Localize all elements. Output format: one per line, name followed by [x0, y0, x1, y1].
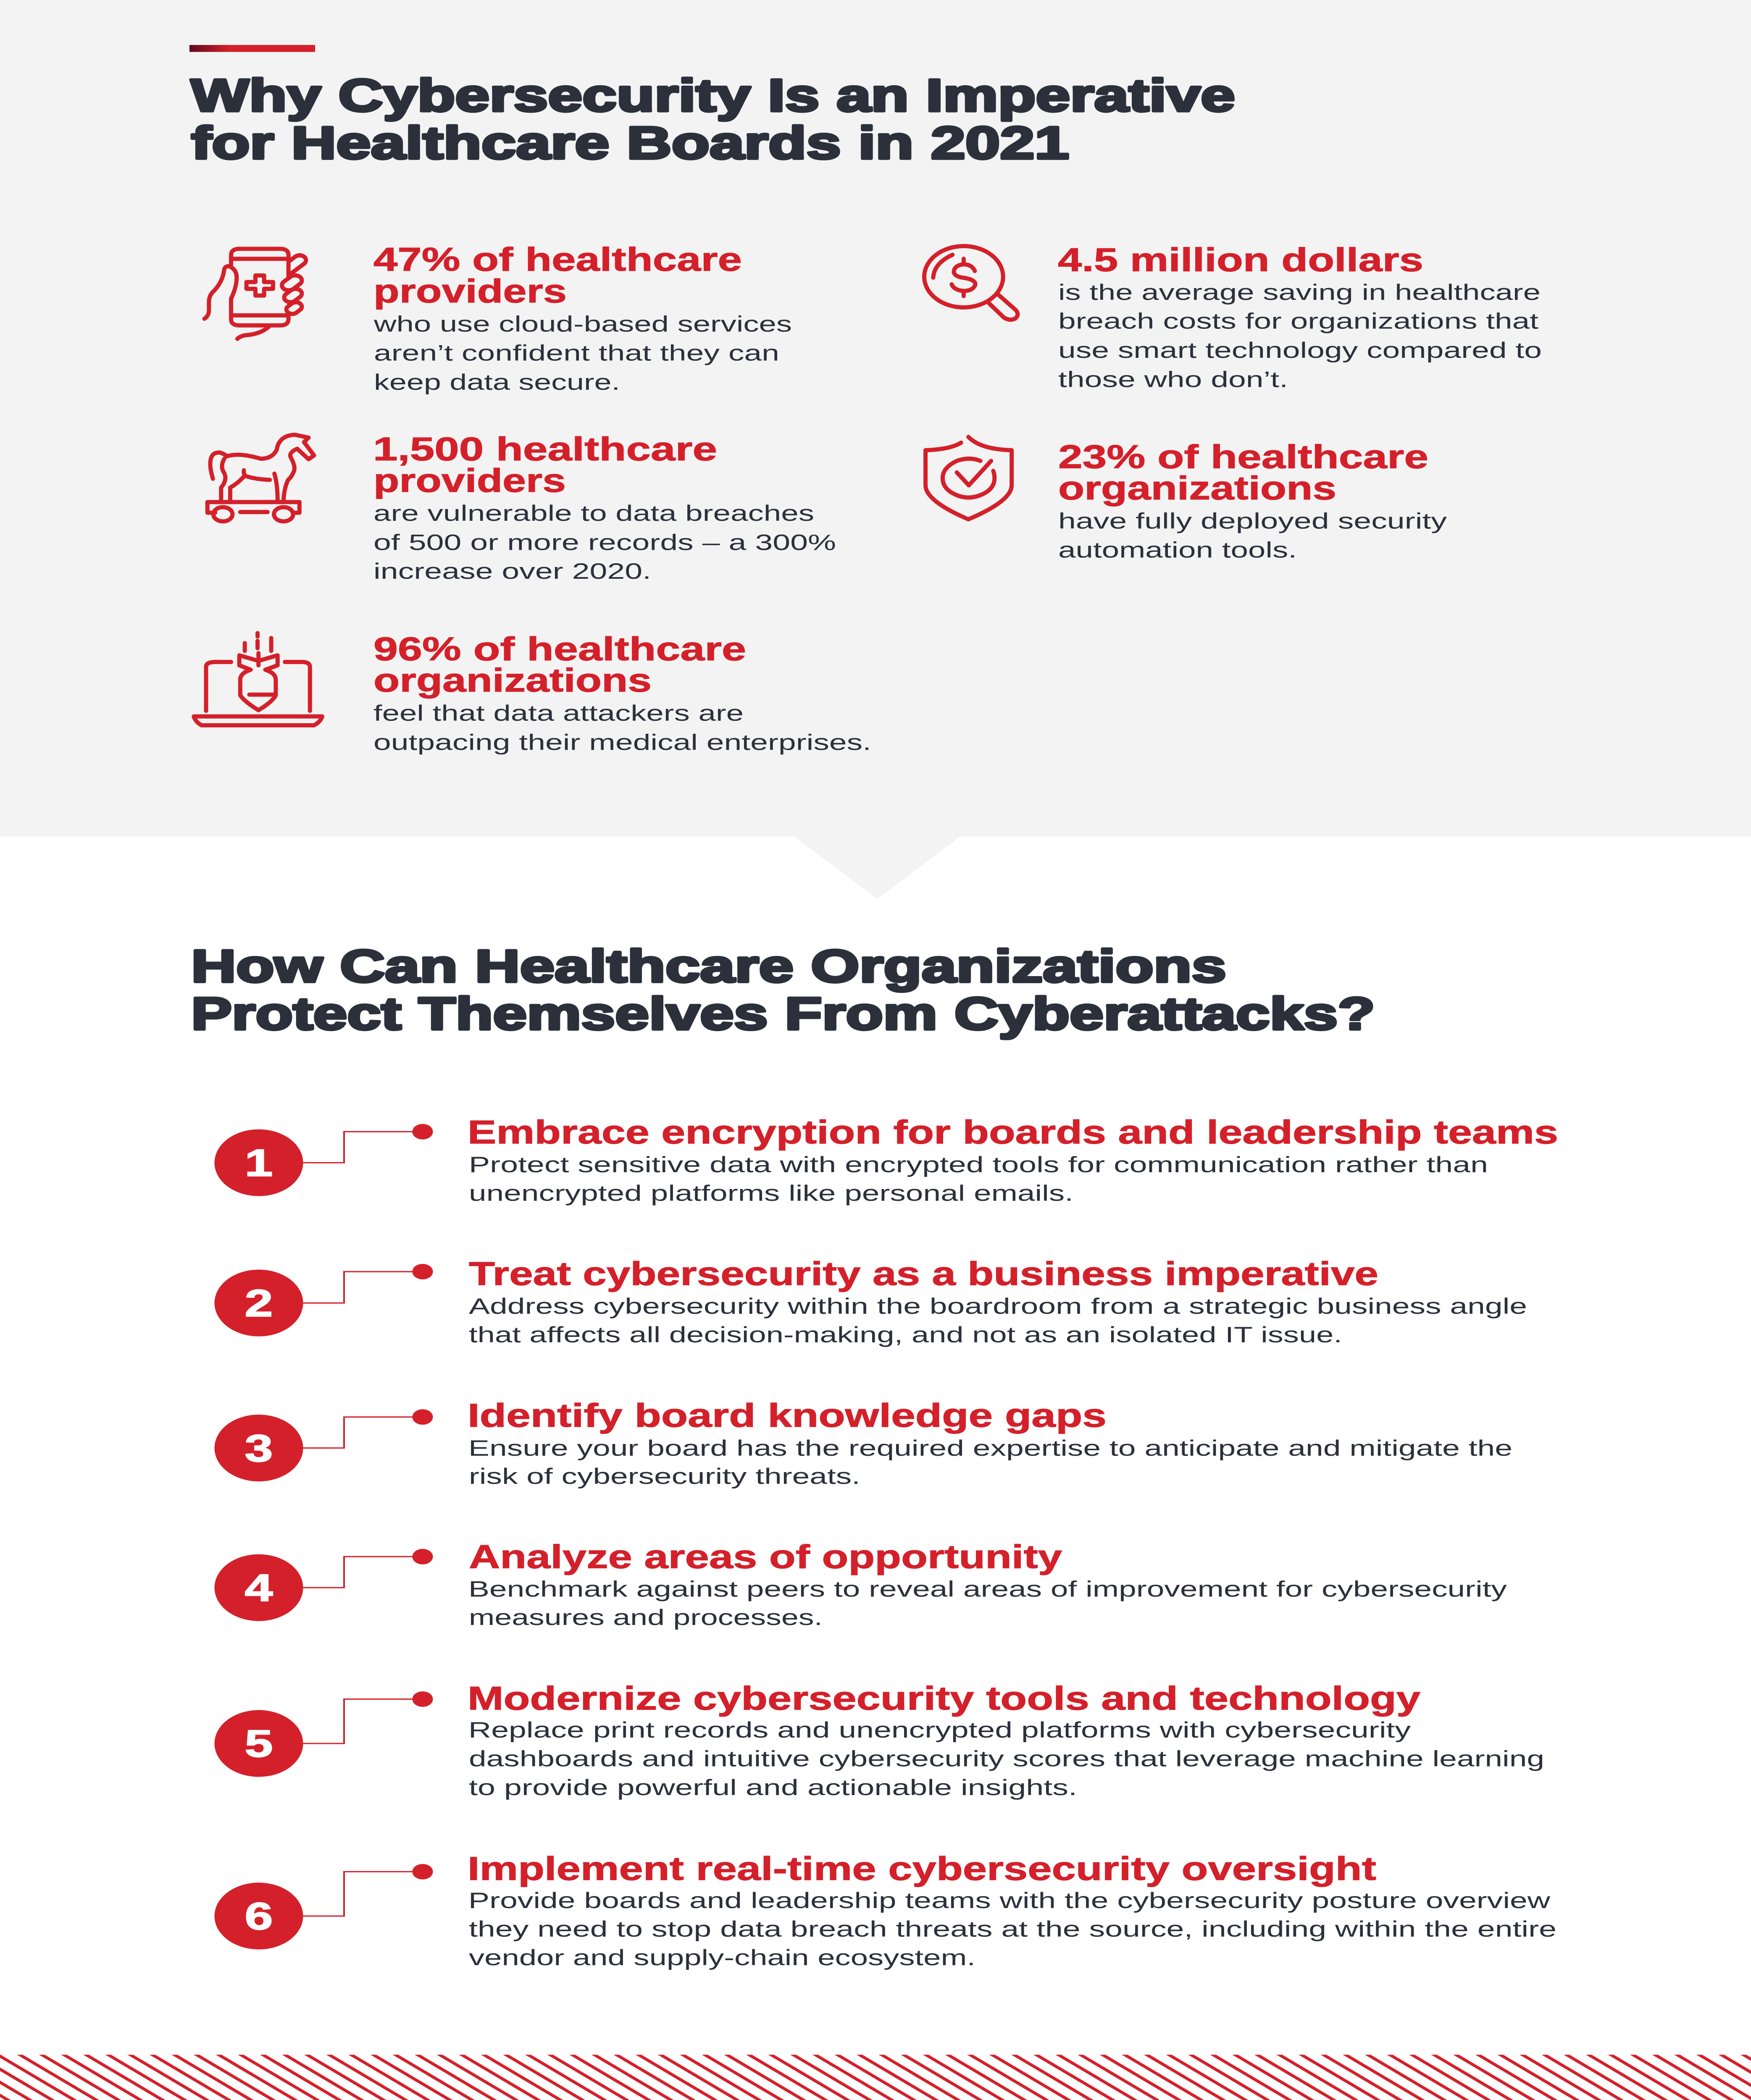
step 5 text: dashboards and intuitive cybersecurity scores that leverage machine learning — [469, 1747, 1544, 1771]
step 2 text: that affects all decision-making, and not as an isolated IT issue. — [469, 1323, 1342, 1347]
number badge 5 — [214, 1710, 303, 1777]
connector 4 — [303, 1557, 423, 1588]
icon: trojan horse on cart — [208, 435, 314, 521]
dot 4 — [413, 1549, 433, 1564]
dot 6 — [413, 1864, 433, 1880]
step 1 text: Protect sensitive data with encrypted tools for communication rather than — [469, 1152, 1488, 1177]
stat: 4.5 million dollars: those who don’t. — [1058, 367, 1288, 392]
stat: 47% of healthcare providers: aren’t confident that they can — [374, 341, 779, 366]
step 4 text: measures and processes. — [469, 1605, 823, 1630]
stat: 1,500 healthcare providers: 1,500 healthcare — [373, 431, 717, 467]
section heading: Protect Themselves From Cyberattacks? — [191, 988, 1375, 1040]
icon: shield with check mark — [925, 437, 1012, 519]
step 4 text: Analyze areas of opportunity — [469, 1538, 1062, 1575]
step 6 text: Implement real-time cybersecurity oversight — [468, 1850, 1376, 1887]
stat: 47% of healthcare providers: who use cloud-based services — [373, 312, 792, 336]
panel background with pointer — [0, 0, 1751, 899]
title: Why Cybersecurity Is an Imperative — [191, 70, 1235, 121]
dot 1 — [413, 1124, 433, 1139]
step 6 text: vendor and supply-chain ecosystem. — [469, 1945, 975, 1970]
number badge 6 — [214, 1882, 303, 1950]
stat: 1,500 healthcare providers — [373, 431, 836, 584]
connector 5 — [303, 1699, 423, 1743]
dot 3 — [413, 1409, 433, 1425]
stat: 4.5 million dollars — [1058, 242, 1542, 392]
step 3 text: risk of cybersecurity threats. — [469, 1464, 860, 1489]
stat: 96% of healthcare organizations: outpacing their medical enterprises. — [373, 730, 871, 755]
panel: why cybersecurity statistics — [0, 0, 1751, 899]
number badge 4 — [214, 1554, 303, 1621]
footer stripe band — [0, 2055, 1751, 2100]
step 2 text: Address cybersecurity within the boardroom from a strategic business angle — [469, 1294, 1527, 1319]
connector 3 — [303, 1417, 423, 1448]
stat: 4.5 million dollars: use smart technology compared to — [1058, 338, 1542, 363]
step 2 text: Treat cybersecurity as a business imperative — [469, 1255, 1378, 1292]
step 1 text — [468, 1114, 1558, 1206]
connector 2 — [303, 1272, 423, 1303]
title: for Healthcare Boards in 2021 — [191, 118, 1069, 169]
stat: 47% of healthcare providers: providers — [373, 273, 567, 310]
stat: 47% of healthcare providers: 47% of healthcare — [373, 241, 742, 278]
stat: 1,500 healthcare providers: are vulnerable to data breaches — [373, 501, 814, 526]
accent bar — [189, 45, 315, 52]
step 3 text — [468, 1397, 1512, 1489]
step 1 text: unencrypted platforms like personal emails. — [469, 1181, 1073, 1206]
stat: 4.5 million dollars: breach costs for organizations that — [1058, 309, 1538, 333]
panel: how to protect steps — [191, 941, 1558, 1970]
stat: 96% of healthcare organizations: organizations — [373, 662, 652, 699]
number badge 2 — [214, 1270, 303, 1336]
step 4 — [214, 1538, 1507, 1630]
number badge 2: 2 — [245, 1282, 273, 1325]
stat: 96% of healthcare organizations — [373, 630, 871, 755]
stat: 96% of healthcare organizations: 96% of healthcare — [373, 630, 746, 667]
step 5 text: to provide powerful and actionable insights. — [469, 1775, 1077, 1800]
step 1 — [214, 1114, 1558, 1206]
step 3 — [214, 1397, 1512, 1489]
step 6 text: they need to stop data breach threats at the source, including within the entire — [469, 1917, 1556, 1942]
step 6 text: Provide boards and leadership teams with the cybersecurity posture overview — [468, 1888, 1550, 1913]
step 3 text: Identify board knowledge gaps — [468, 1397, 1107, 1434]
stat: 23% of healthcare organizations — [1058, 438, 1447, 563]
step 5 text: Modernize cybersecurity tools and technology — [468, 1680, 1420, 1717]
stat: 1,500 healthcare providers: increase over 2020. — [373, 559, 651, 584]
number badge 5: 5 — [245, 1722, 273, 1765]
step 5 text — [468, 1680, 1544, 1800]
stat: 96% of healthcare organizations: feel that data attackers are — [373, 701, 744, 726]
step 4 text: Benchmark against peers to reveal areas of improvement for cybersecurity — [468, 1577, 1507, 1601]
stat: 47% of healthcare providers: keep data secure. — [374, 370, 620, 395]
stat: 23% of healthcare organizations: 23% of healthcare — [1058, 438, 1428, 475]
step 2 — [214, 1255, 1527, 1347]
number badge 1: 1 — [245, 1142, 273, 1184]
stat: 23% of healthcare organizations: organizations — [1058, 470, 1336, 507]
step 2 text — [469, 1255, 1527, 1347]
stat: 23% of healthcare organizations: automation tools. — [1058, 538, 1297, 563]
stat: 47% of healthcare providers — [373, 241, 792, 395]
step 3 text: Ensure your board has the required expertise to anticipate and mitigate the — [468, 1436, 1512, 1461]
section heading: How Can Healthcare Organizations — [191, 941, 1226, 992]
stat: 4.5 million dollars: is the average saving in healthcare — [1058, 280, 1541, 305]
number badge 3: 3 — [245, 1427, 273, 1470]
dot 5 — [413, 1691, 433, 1707]
step 6 text — [468, 1850, 1556, 1970]
stat: 23% of healthcare organizations: have fully deployed security — [1058, 509, 1447, 533]
number badge 4: 4 — [245, 1567, 273, 1609]
step 1 text: Embrace encryption for boards and leadership teams — [468, 1114, 1558, 1150]
number badge 1 — [214, 1129, 303, 1196]
stat: 4.5 million dollars: 4.5 million dollars — [1058, 242, 1423, 278]
stat: 1,500 healthcare providers: of 500 or more records – a 300% — [373, 530, 836, 555]
section heading — [191, 941, 1375, 1040]
title — [191, 70, 1235, 169]
icon: magnifying glass with dollar sign — [924, 246, 1017, 320]
connector 6 — [303, 1872, 423, 1916]
step 6 — [214, 1850, 1556, 1970]
dot 2 — [413, 1264, 433, 1279]
icon: bomb falling on laptop — [194, 633, 322, 725]
number badge 6: 6 — [245, 1895, 273, 1937]
step 5 — [214, 1680, 1544, 1800]
number badge 3 — [214, 1415, 303, 1481]
step 4 text — [468, 1538, 1507, 1630]
stat: 1,500 healthcare providers: providers — [373, 462, 566, 499]
icon: hand holding phone with medical cross — [205, 249, 306, 339]
step 5 text: Replace print records and unencrypted platforms with cybersecurity — [468, 1718, 1411, 1743]
connector 1 — [303, 1132, 423, 1163]
